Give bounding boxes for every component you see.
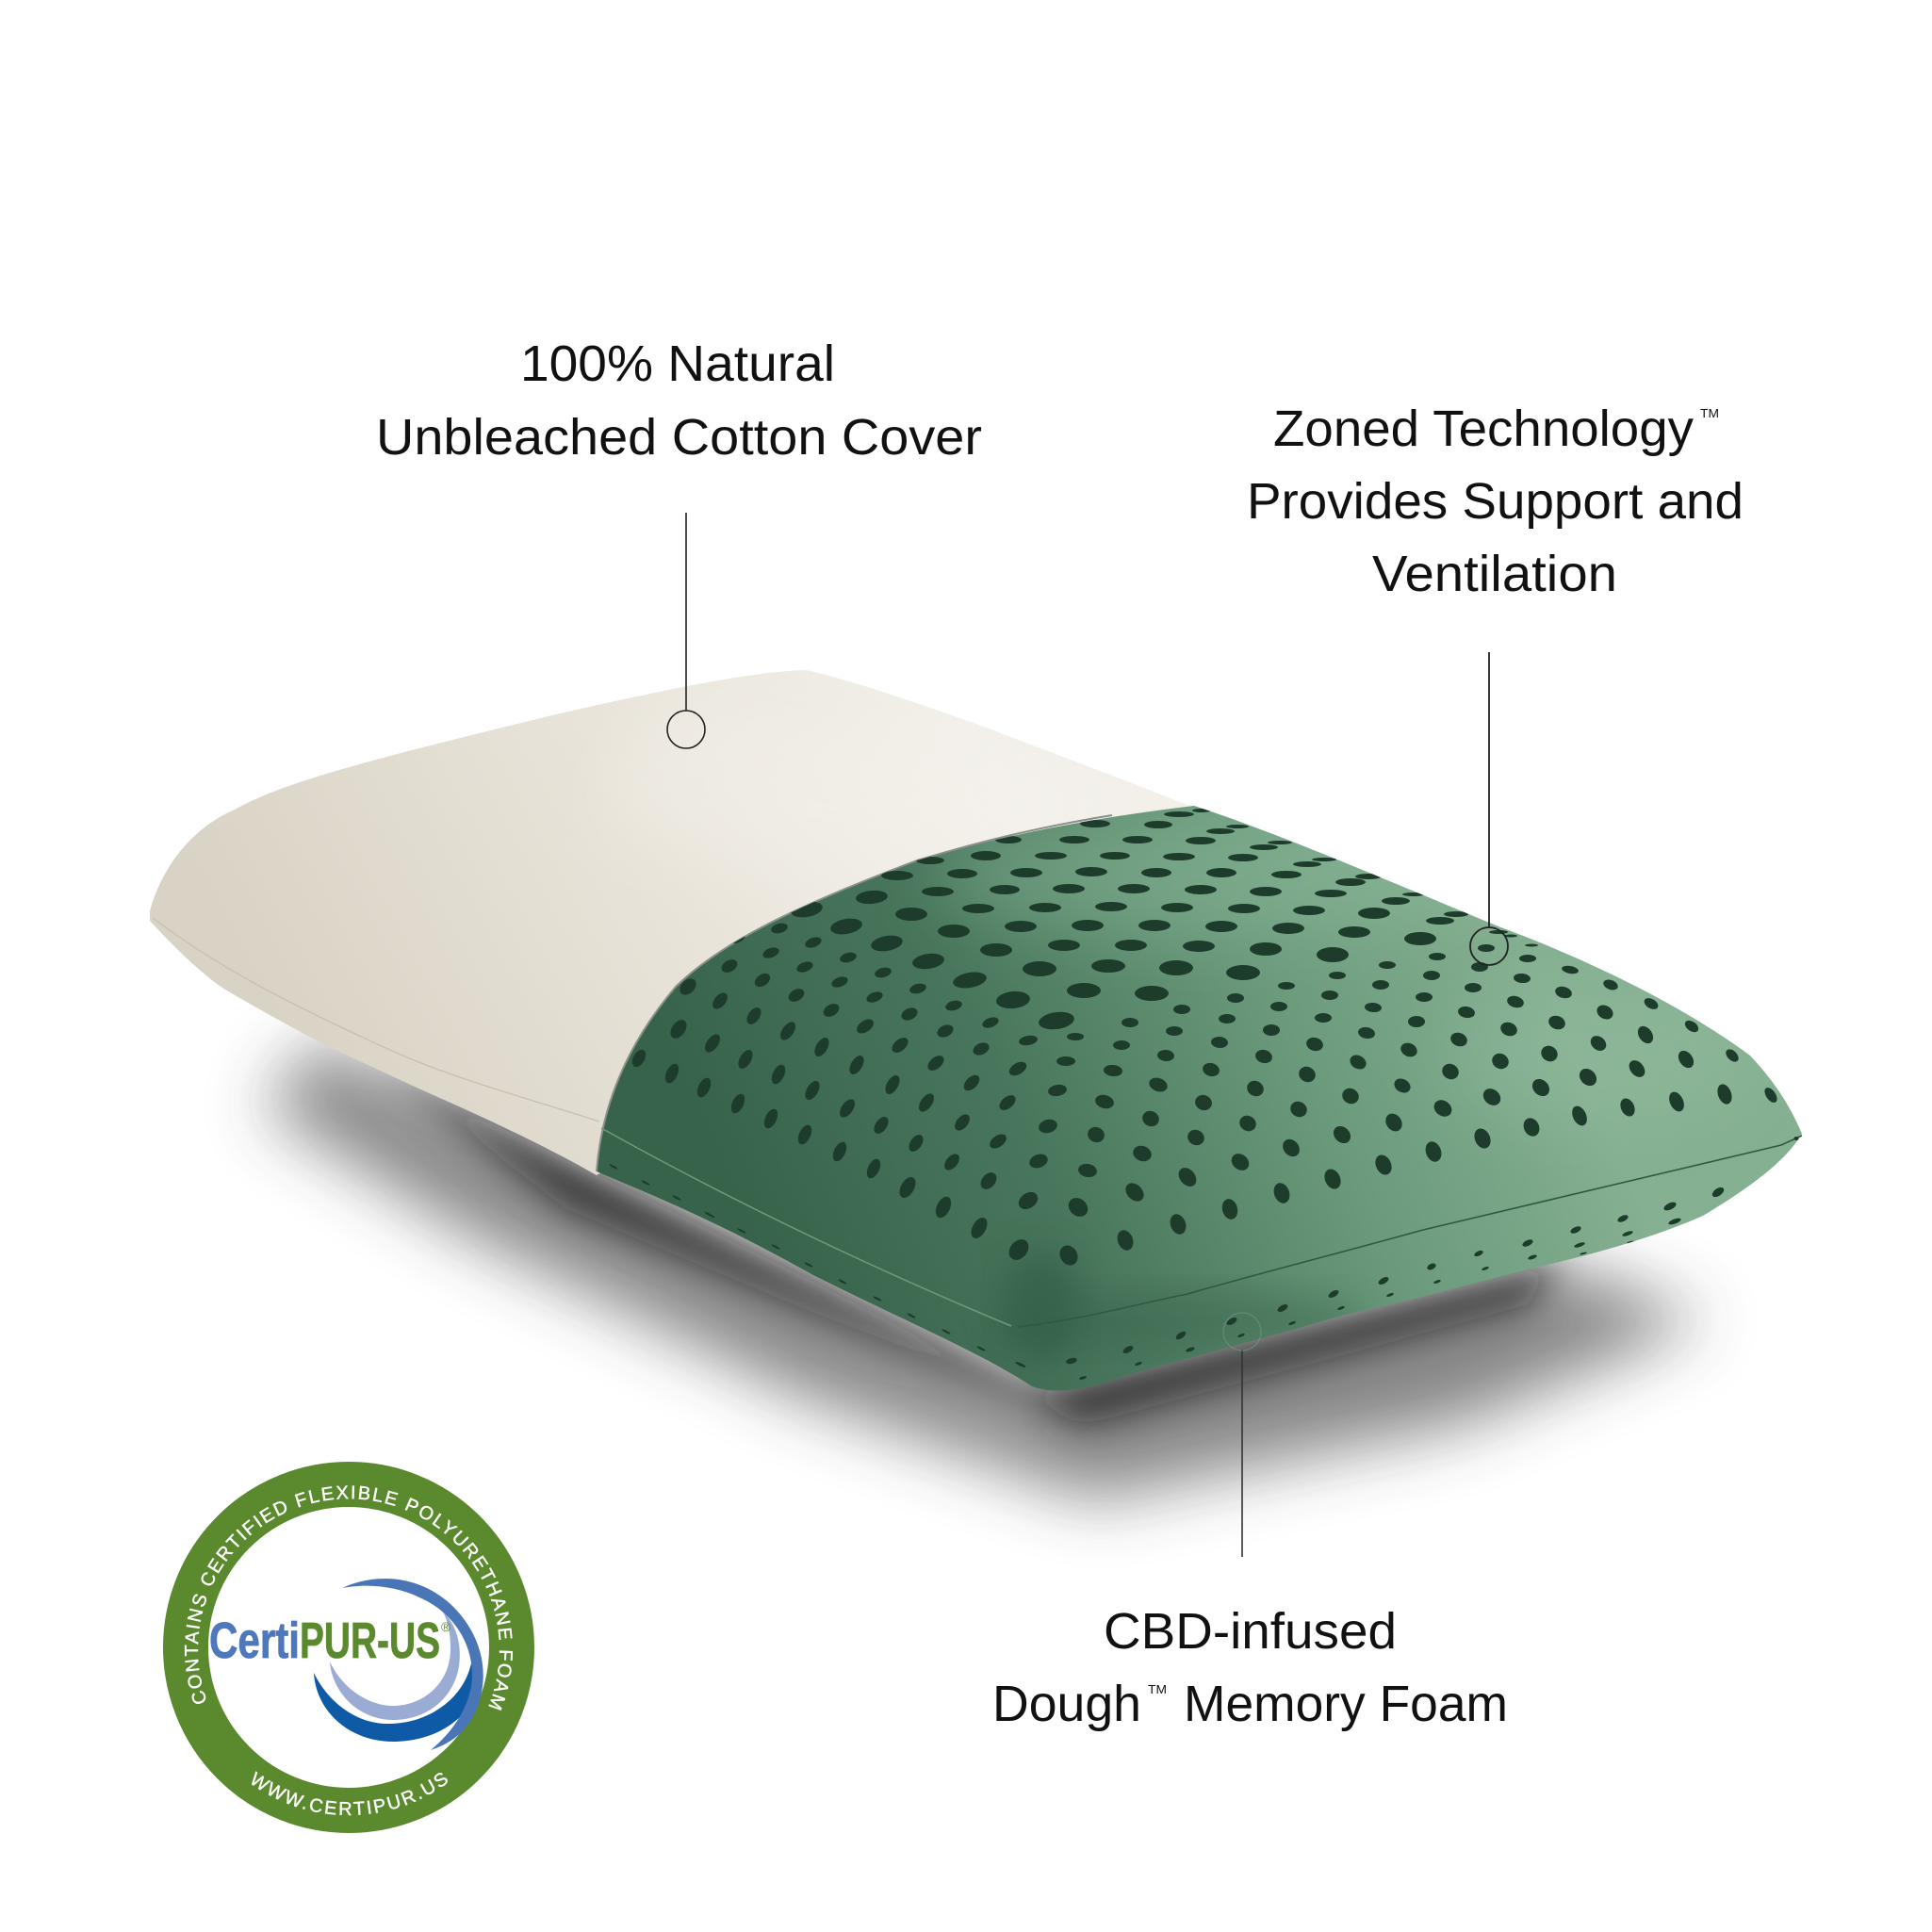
callout: cotton cover label: 100% Natural — [520, 336, 835, 392]
leader line: zoned technology — [1470, 652, 1508, 965]
callout: memory foam label: Memory Foam — [1184, 1676, 1508, 1732]
callout: memory foam label: CBD-infused — [1104, 1603, 1397, 1660]
callout: cotton cover label — [376, 336, 982, 466]
callout: zoned technology label: Zoned Technology — [1273, 401, 1694, 457]
callout: zoned technology label: TM — [1700, 406, 1719, 420]
badge ring text — [185, 1485, 513, 1815]
callout: zoned technology label — [1247, 401, 1744, 602]
callout: zoned technology label: Provides Support and — [1247, 473, 1744, 530]
leader line: memory foam — [1223, 1313, 1261, 1557]
callout: memory foam label — [992, 1603, 1508, 1732]
badge ring — [186, 1484, 512, 1810]
leader line: cotton cover — [667, 513, 705, 748]
badge logotype — [209, 1613, 451, 1669]
pillow shadow — [264, 1041, 1706, 1498]
badge swooshes — [314, 1579, 483, 1750]
badge ring text: WWW.CERTIPUR.US — [252, 1771, 448, 1815]
badge logotype: ® — [441, 1619, 451, 1634]
foam seams — [601, 1128, 1802, 1327]
badge logotype: Certi — [209, 1613, 300, 1669]
callout: memory foam label: TM — [1148, 1682, 1167, 1696]
callout: memory foam label: Dough — [992, 1676, 1141, 1732]
callout: zoned technology label: Ventilation — [1372, 546, 1617, 602]
certification badge — [163, 1462, 534, 1833]
callout: cotton cover label: Unbleached Cotton Cover — [376, 409, 982, 466]
foam ventilation holes — [609, 809, 1798, 1380]
foam edge rim — [597, 815, 1112, 1171]
badge logotype: PUR-US — [300, 1613, 440, 1669]
pillow: green memory foam — [597, 806, 1802, 1390]
pillow: cream cotton cover — [150, 670, 1202, 1175]
badge ring text: CONTAINS CERTIFIED FLEXIBLE POLYURETHANE FOAM — [185, 1485, 513, 1711]
